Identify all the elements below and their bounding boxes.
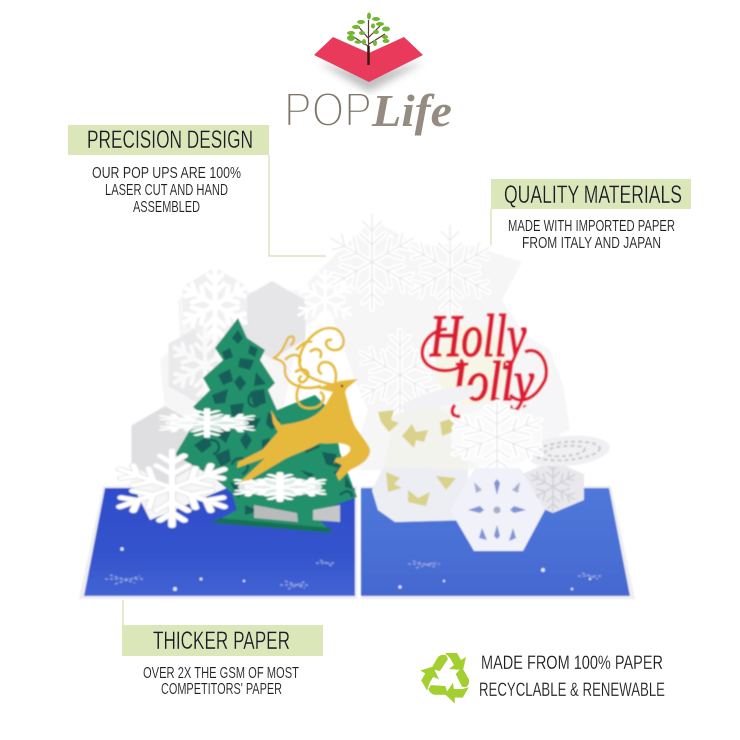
panel: recycle note: [417, 653, 665, 705]
panel: precision design: [68, 125, 269, 216]
card base: left blue panel: [84, 488, 355, 596]
text block: MADE FROM 100% PAPER: [481, 653, 663, 674]
red Holly Jolly lettering: Jolly: [446, 351, 534, 413]
text block: FROM ITALY AND JAPAN: [522, 235, 661, 252]
paper snowflake backdrop: [130, 214, 570, 520]
icon: logo tree: [347, 12, 390, 65]
text block: ASSEMBLED: [133, 199, 200, 216]
lettering swashes: [422, 329, 546, 428]
heading box: thicker paper: [122, 625, 323, 656]
icon: red open book: [314, 37, 423, 82]
tree cut-out pattern: [194, 330, 353, 515]
card base: right blue panel: [361, 488, 630, 596]
heading box: precision design: [68, 125, 269, 155]
antlers: [274, 328, 344, 408]
text block: RECYCLABLE & RENEWABLE: [479, 680, 665, 701]
text block: LASER CUT AND HAND: [105, 182, 228, 199]
leader lines: [123, 155, 491, 625]
eye: [341, 385, 343, 387]
card base: white border: [79, 486, 357, 599]
text block: OUR POP UPS ARE 100%: [92, 165, 241, 182]
text block: COMPETITORS' PAPER: [161, 681, 282, 698]
red Holly Jolly lettering: [422, 303, 546, 428]
text block: [479, 653, 665, 701]
logo wordmark POP: POP: [284, 84, 372, 137]
snowflake: lower left: [112, 450, 232, 526]
panel: thicker paper: [122, 625, 323, 698]
logo: POP Life: [284, 12, 452, 137]
body: [237, 379, 370, 482]
icon: logo shadow: [318, 62, 424, 92]
tree trunk opening: [254, 505, 298, 522]
green Christmas tree: [175, 318, 357, 533]
snow on tree upper: [155, 409, 259, 437]
heading: PRECISION DESIGN: [87, 126, 253, 154]
logo wordmark Life: Life: [371, 85, 452, 136]
golden reindeer: [237, 328, 370, 482]
text block: [508, 218, 675, 252]
red Holly Jolly lettering: Holly: [429, 303, 526, 369]
snow on tree lower: [230, 473, 330, 501]
front hexagon snowflake: [450, 468, 545, 551]
heading box: quality materials: [491, 179, 691, 209]
right white snowflakes: [399, 380, 611, 513]
panel: quality materials: [491, 179, 691, 252]
sparkles on card: [105, 547, 602, 591]
pop-up card illustration: [79, 214, 635, 599]
heading: THICKER PAPER: [153, 627, 290, 655]
text block: OVER 2X THE GSM OF MOST: [143, 665, 299, 682]
text block: [143, 665, 299, 698]
text block: MADE WITH IMPORTED PAPER: [508, 218, 675, 235]
icon: recycling arrows: [417, 653, 476, 705]
cream lit panel: [436, 325, 508, 405]
hexagon shapes left: [238, 281, 306, 359]
right hexagon box with gold cut-outs: [372, 400, 468, 522]
text block: [92, 165, 241, 216]
